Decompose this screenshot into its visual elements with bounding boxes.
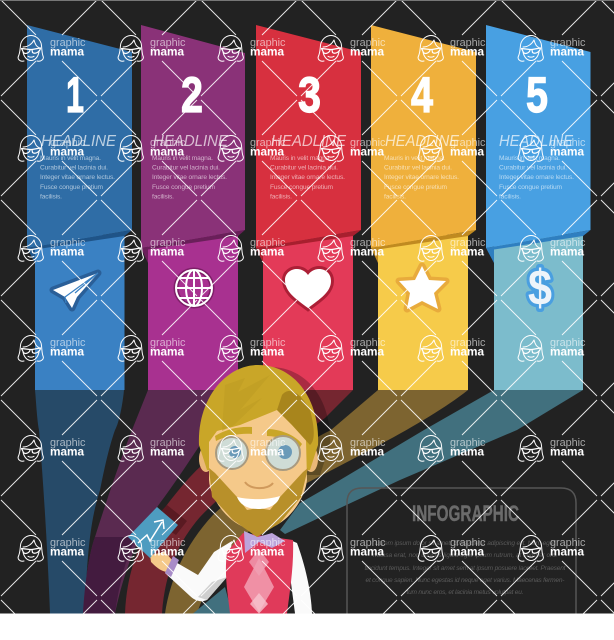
fold <box>256 230 361 263</box>
watermark logos: mama <box>450 344 485 358</box>
upper band <box>256 25 361 248</box>
shadow: ribbon 3 <box>125 390 353 614</box>
watermark logos: graphic <box>550 537 586 549</box>
watermark logos: mama <box>50 544 85 558</box>
watermark logos: mama <box>150 444 185 458</box>
body text: Fusce congue pretium <box>270 184 334 191</box>
body text: Curabitur vel lacinia dui. <box>499 164 567 172</box>
watermark logos: graphic <box>450 37 486 49</box>
watermark logos: graphic <box>150 37 186 49</box>
watermark logos: graphic <box>450 337 486 349</box>
watermark logos: graphic <box>50 437 86 449</box>
watermark logos: graphic <box>450 137 486 149</box>
body text: Mauris in velit magna. <box>40 155 101 162</box>
watermark logos: mama <box>150 244 185 258</box>
watermark logos: graphic <box>450 437 486 449</box>
watermark logos: mama <box>450 144 485 158</box>
watermark logos: graphic <box>450 537 486 549</box>
body text: Curabitur vel lacinia dui. <box>384 164 452 172</box>
watermark logos: graphic <box>350 37 386 49</box>
number: 4 <box>411 67 433 123</box>
panel: ribbon 5 light blue <box>486 25 590 390</box>
icon: globe <box>176 270 212 306</box>
watermark logos: mama <box>250 244 285 258</box>
watermark logos: graphic <box>550 237 586 249</box>
watermark logos: mama <box>250 444 285 458</box>
box title: INFOGRAPHIC <box>412 501 519 526</box>
headline: HEADLINE <box>153 133 229 150</box>
shadow: ribbon 1 <box>35 390 124 614</box>
watermark logos: graphic <box>250 337 286 349</box>
watermark logos: mama <box>50 344 85 358</box>
shadows of the ribbons <box>35 390 583 614</box>
watermark logos: graphic <box>250 37 286 49</box>
icon: paper plane <box>53 273 98 308</box>
watermark logos: graphic <box>450 237 486 249</box>
body text: facilisis. <box>152 194 174 200</box>
headline: HEADLINE <box>41 133 117 150</box>
watermark logos: mama <box>550 144 585 158</box>
body text: Mauris in velit magna. <box>270 155 331 162</box>
watermark logos: mama <box>550 344 585 358</box>
hand <box>150 552 172 572</box>
box text: et congue sapien. Nunc egestas id neque eget varius. Maecenas fermen- <box>366 577 565 584</box>
watermark logos: mama <box>550 444 585 458</box>
body text: Integer vitae ornare lectus. <box>384 174 459 181</box>
watermark logos: mama <box>150 44 185 58</box>
body text: Integer vitae ornare lectus. <box>152 174 227 181</box>
body text: Curabitur vel lacinia dui. <box>270 164 338 172</box>
shadow: ribbon 5 lower part <box>193 587 232 614</box>
body text: Integer vitae ornare lectus. <box>40 174 115 181</box>
body text <box>152 155 227 200</box>
phone arrow <box>138 520 164 543</box>
number: 3 <box>298 67 321 123</box>
phone card <box>128 507 178 558</box>
lower band <box>378 235 468 390</box>
hair lock <box>277 391 314 445</box>
ears <box>199 446 318 472</box>
watermark logos: mama <box>550 44 585 58</box>
watermark logos: graphic <box>50 237 86 249</box>
nose <box>245 482 273 488</box>
lower band <box>263 235 353 390</box>
lower band <box>35 235 124 390</box>
upper band <box>486 25 590 248</box>
glasses <box>216 436 300 470</box>
watermark logos: mama <box>50 44 85 58</box>
body text: facilisis. <box>499 194 521 200</box>
watermark logos: graphic <box>350 237 386 249</box>
panel: ribbon 1 blue <box>27 25 132 390</box>
arm shading <box>198 577 227 600</box>
watermark logos: graphic <box>250 137 286 149</box>
vest diamonds <box>244 549 274 614</box>
watermark logos: mama <box>450 44 485 58</box>
watermark logos: graphic <box>150 237 186 249</box>
watermark logos: graphic <box>350 137 386 149</box>
fold <box>27 230 132 263</box>
box text <box>364 540 567 596</box>
wristband <box>165 556 179 577</box>
fold <box>486 230 590 263</box>
panel: infographic text box <box>347 488 576 614</box>
body text: Integer vitae ornare lectus. <box>270 174 345 181</box>
watermark logos: graphic <box>350 337 386 349</box>
body text <box>384 155 459 200</box>
upper band <box>371 25 476 248</box>
watermark logos: graphic <box>50 137 86 149</box>
watermark logos: mama <box>450 244 485 258</box>
watermark logos: mama <box>150 144 185 158</box>
top edge line <box>0 0 614 1</box>
watermark logos: graphic <box>250 537 286 549</box>
watermark logos <box>18 36 586 561</box>
watermark logos: mama <box>550 244 585 258</box>
number: 2 <box>181 67 203 123</box>
lower band <box>494 235 583 390</box>
watermark logos: mama <box>150 344 185 358</box>
watermark logos: mama <box>50 444 85 458</box>
watermark logos: mama <box>350 44 385 58</box>
left sleeve <box>165 541 232 601</box>
watermark logos: mama <box>250 344 285 358</box>
upper band <box>141 25 245 248</box>
watermark logos: graphic <box>350 437 386 449</box>
watermark logos: mama <box>350 544 385 558</box>
watermark logos: mama <box>350 144 385 158</box>
shadow: ribbon 2 <box>83 390 238 614</box>
box text: massa erat, non ultrices ligula eget ipsum rutrum, at semper orci <box>373 552 558 559</box>
watermark logos: mama <box>50 244 85 258</box>
eyebrows <box>215 427 302 447</box>
hair <box>199 365 318 470</box>
body text: Mauris in velit magna. <box>499 155 560 162</box>
body text: Curabitur vel lacinia dui. <box>40 164 108 172</box>
body text <box>270 155 345 200</box>
body text <box>499 155 574 200</box>
box outline <box>347 488 576 614</box>
number: 5 <box>526 67 548 123</box>
right sleeve <box>288 540 312 614</box>
shadow: ribbon 4 <box>165 390 468 614</box>
head shadow <box>211 367 330 475</box>
fold <box>371 230 476 263</box>
box text: tum nunc eros, et lacinia metus volutpat eu. <box>406 589 524 596</box>
watermark logos: graphic <box>150 337 186 349</box>
icon: heart <box>285 269 331 308</box>
body text: Mauris in velit magna. <box>152 155 213 162</box>
watermark logos: graphic <box>550 437 586 449</box>
watermark logos: mama <box>450 444 485 458</box>
watermark logos: mama <box>350 344 385 358</box>
watermark logos: graphic <box>150 537 186 549</box>
panel: ribbon 3 red <box>256 25 361 390</box>
watermark logos: mama <box>150 544 185 558</box>
icon: dollar: $ <box>528 260 552 316</box>
headline: HEADLINE <box>271 133 347 150</box>
watermark logos: mama <box>350 244 385 258</box>
fold <box>141 230 245 263</box>
headline: HEADLINE <box>499 133 574 150</box>
watermark logos: mama <box>550 544 585 558</box>
watermark logos: graphic <box>550 337 586 349</box>
watermark logos: graphic <box>150 137 186 149</box>
watermark logos: graphic <box>550 137 586 149</box>
body text: Mauris in velit magna. <box>384 155 445 162</box>
box text: tincidunt tempus. Integer sit amet sem at ipsum posuere laoreet. Praesent <box>364 565 567 572</box>
watermark logos: mama <box>250 44 285 58</box>
panel: ribbon 4 yellow <box>371 25 476 390</box>
character: bearded man with glasses <box>128 365 330 614</box>
watermark logos: graphic <box>50 537 86 549</box>
face <box>209 410 307 530</box>
mouth <box>237 496 280 509</box>
body text: Fusce congue pretium <box>152 184 216 191</box>
watermark logos: mama <box>450 544 485 558</box>
watermark logos: mama <box>50 144 85 158</box>
body text: Curabitur vel lacinia dui. <box>152 164 220 172</box>
body text: facilisis. <box>384 194 406 200</box>
panel: ribbon 2 purple <box>141 25 245 390</box>
watermark logos: graphic <box>250 437 286 449</box>
box text: Lorem ipsum dolor sit amet, consectetur adipiscing elit. Nam eget <box>375 540 556 547</box>
watermark logos: graphic <box>150 437 186 449</box>
icon: star <box>399 266 446 309</box>
watermark logos: mama <box>250 544 285 558</box>
watermark logos: mama <box>350 444 385 458</box>
body text: Integer vitae ornare lectus. <box>499 174 574 181</box>
body text: facilisis. <box>40 194 62 200</box>
headline: HEADLINE <box>385 133 460 150</box>
body text <box>40 155 115 200</box>
watermark logos: graphic <box>250 237 286 249</box>
phone shadow <box>153 505 187 535</box>
body text: Fusce congue pretium <box>40 184 104 191</box>
watermark logos: graphic <box>50 337 86 349</box>
hair highlights <box>222 375 270 431</box>
body text: facilisis. <box>270 194 292 200</box>
number: 1 <box>66 67 84 123</box>
body text: Fusce congue pretium <box>384 184 448 191</box>
shadow: ribbon 5 <box>280 390 583 534</box>
body text: Fusce congue pretium <box>499 184 562 191</box>
vest <box>226 533 293 614</box>
bow tie <box>244 531 285 553</box>
watermark logos: graphic <box>350 537 386 549</box>
watermark logos: graphic <box>550 37 586 49</box>
watermark logos: graphic <box>50 37 86 49</box>
watermark logos: mama <box>250 144 285 158</box>
lower band <box>148 235 238 390</box>
upper band <box>27 25 132 248</box>
beard <box>209 468 308 537</box>
